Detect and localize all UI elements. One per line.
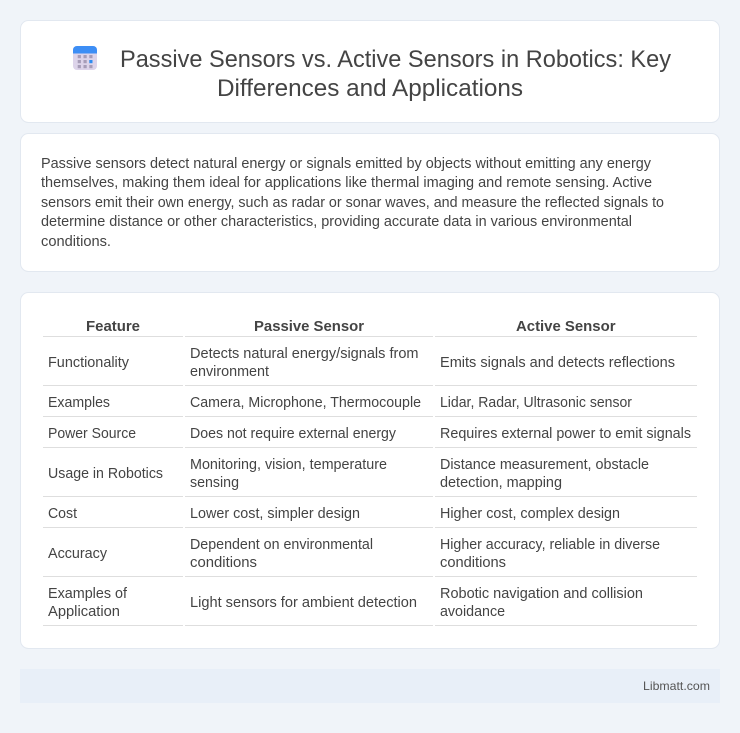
- row: usage in robotics: Usage in Robotics: [48, 466, 163, 482]
- row: usage in robotics: Monitoring, vision, temperature: [190, 457, 387, 473]
- intro paragraph: [41, 156, 664, 250]
- row: accuracy: Dependent on environmental: [190, 537, 373, 553]
- row: examples of application: avoidance: [440, 604, 505, 620]
- panel: title card: [20, 20, 720, 122]
- row: usage in robotics: sensing: [190, 475, 239, 491]
- icon: calendar grid: [73, 46, 97, 70]
- row: examples of application: Robotic navigation and collision: [440, 586, 643, 602]
- table header: Active Sensor: [516, 318, 616, 335]
- footer bar: [20, 669, 720, 703]
- row: cost: [43, 506, 697, 528]
- row: cost: Cost: [48, 506, 77, 522]
- row: power source: Does not require external energy: [190, 426, 397, 442]
- row: functionality: Functionality: [48, 355, 130, 371]
- row: examples of application: [43, 586, 697, 626]
- footer text: Libmatt.com: [643, 679, 710, 693]
- row: accuracy: conditions: [190, 555, 257, 571]
- row: usage in robotics: detection, mapping: [440, 475, 562, 491]
- row: usage in robotics: [43, 457, 697, 497]
- intro paragraph: conditions.: [41, 234, 111, 250]
- title: [120, 47, 671, 102]
- intro paragraph: Passive sensors detect natural energy or signals emitted by objects without emitting any energy: [41, 156, 652, 172]
- table header: Feature: [86, 318, 140, 335]
- row: cost: Lower cost, simpler design: [190, 506, 360, 522]
- intro paragraph: sensors emit their own energy, such as radar or sonar waves, and measure the reflected signals to: [41, 195, 664, 211]
- row: power source: Power Source: [48, 426, 136, 442]
- row: cost: Higher cost, complex design: [440, 506, 620, 522]
- table header: [43, 318, 697, 337]
- row: power source: Requires external power to emit signals: [440, 426, 691, 442]
- title: Differences and Applications: [217, 76, 523, 102]
- row: examples of application: Examples of: [48, 586, 128, 602]
- row: examples: [43, 395, 697, 417]
- intro paragraph: themselves, making them ideal for applications like thermal imaging and remote sensing. Active: [41, 175, 652, 191]
- row: accuracy: conditions: [440, 555, 506, 571]
- row: examples of application: Light sensors for ambient detection: [190, 595, 417, 611]
- row: examples: Lidar, Radar, Ultrasonic sensor: [440, 395, 632, 411]
- panel: introduction text: [20, 134, 720, 272]
- row: usage in robotics: Distance measurement, obstacle: [440, 457, 649, 473]
- row: examples: Camera, Microphone, Thermocouple: [190, 395, 421, 411]
- row: functionality: Detects natural energy/signals from: [190, 346, 419, 362]
- intro paragraph: determine distance or other characteristics, providing accurate data in various environmental: [41, 214, 632, 230]
- title: Passive Sensors vs. Active Sensors in Robotics: Key: [120, 47, 671, 73]
- row: accuracy: [43, 537, 697, 577]
- row: examples: Examples: [48, 395, 110, 411]
- row: accuracy: Accuracy: [48, 546, 108, 562]
- row: functionality: Emits signals and detects reflections: [440, 355, 675, 371]
- row: examples of application: Application: [48, 604, 120, 620]
- row: accuracy: Higher accuracy, reliable in diverse: [440, 537, 660, 553]
- row: functionality: [43, 346, 697, 386]
- panel: comparison table: [20, 292, 720, 648]
- row: functionality: environment: [190, 364, 269, 380]
- row: power source: [43, 426, 697, 448]
- table header: Passive Sensor: [254, 318, 364, 335]
